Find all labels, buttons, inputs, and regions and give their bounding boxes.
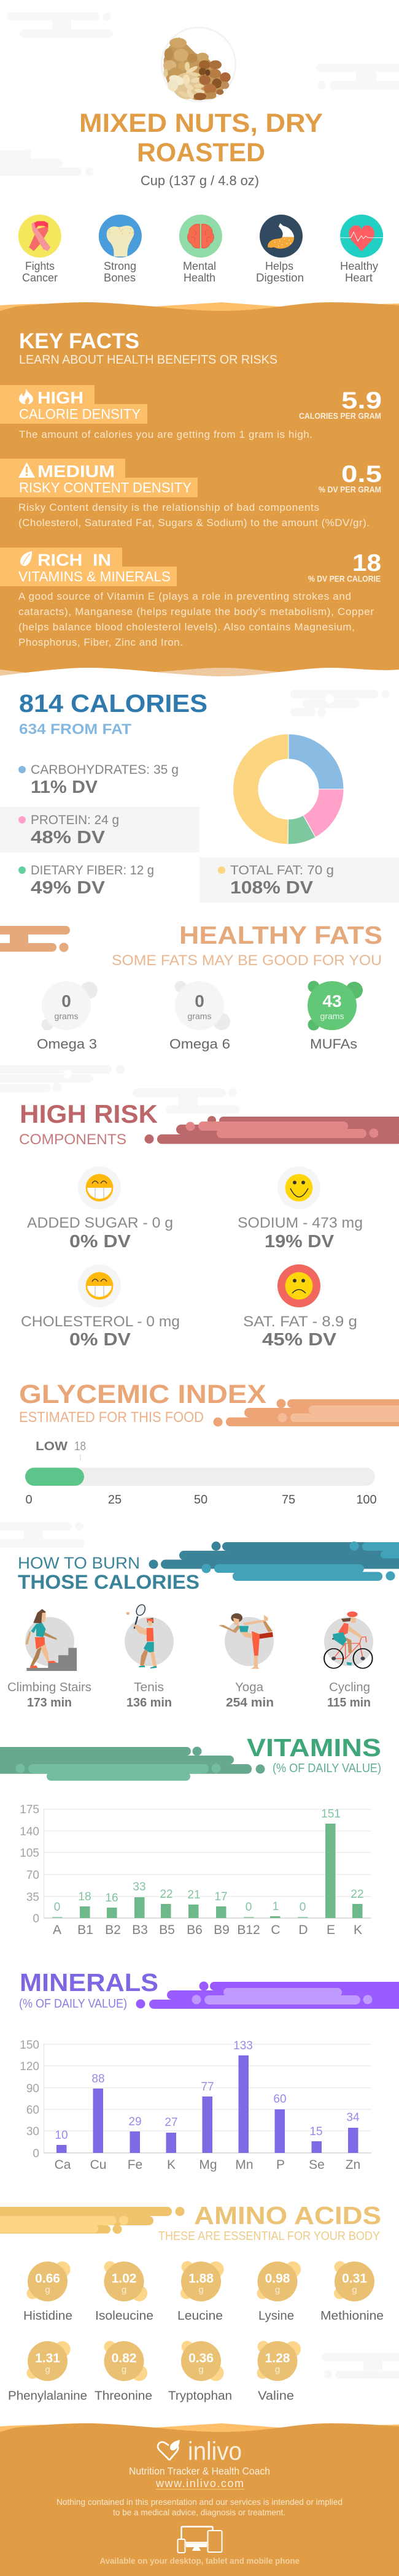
activity: climbing stairs: 173 min — [27, 1696, 72, 1710]
badge: valine: g — [275, 2364, 280, 2375]
activity: yoga: Yoga — [235, 1681, 264, 1694]
item: saturated fat — [243, 1264, 357, 1350]
bar chart: minerals: 77 — [201, 2081, 214, 2093]
heading: minerals: MINERALS — [20, 1968, 158, 1997]
activity: tennis: Tenis — [134, 1681, 164, 1694]
footer — [0, 2423, 399, 2576]
subheading: SOME FATS MAY BE GOOD FOR YOU — [112, 952, 382, 969]
activity: tennis: 136 min — [126, 1696, 172, 1710]
item: sodium: SODIUM - 473 mg — [238, 1215, 363, 1231]
item: cholesterol: 0% DV — [69, 1330, 131, 1350]
subheading: THESE ARE ESSENTIAL FOR YOUR BODY — [158, 2230, 380, 2243]
bar chart: vitamins: 151 — [321, 1808, 341, 1821]
panel: healthy fats — [0, 921, 382, 1052]
badge: tryptophan: g — [198, 2364, 204, 2375]
fact: high calorie density: The amount of calories you are getting from 1 gram is high. — [19, 429, 312, 440]
decorative stripes — [136, 1982, 399, 2009]
item: cholesterol — [21, 1264, 180, 1350]
badge: mufas: MUFAs — [310, 1036, 357, 1052]
bar chart: vitamins: 35 — [26, 1891, 39, 1904]
bar chart: vitamins: 17 — [214, 1890, 228, 1903]
badge: tryptophan — [168, 2341, 232, 2402]
bar chart: minerals: Mn — [235, 2158, 254, 2172]
fact: rich in vitamins and minerals: RICH IN — [37, 551, 111, 569]
fact: rich in vitamins and minerals — [0, 548, 381, 648]
macro: dietary fiber: 49% DV — [31, 878, 106, 898]
bar chart: vitamins: B6 — [187, 1923, 203, 1937]
bar chart: vitamins — [20, 1803, 371, 1937]
badge: threonine: g — [122, 2364, 126, 2375]
badge: tryptophan: 0.36 — [188, 2351, 214, 2366]
icon: healthy heart: Healthy — [340, 260, 378, 272]
macro: total fat: 108% DV — [230, 878, 314, 898]
fact: rich in vitamins and minerals: cataracts), Manganese (helps regulate the body's metabolism), Copper — [18, 606, 374, 617]
website link: www.inlivo.com — [155, 2477, 244, 2490]
serving size: Cup (137 g / 4.8 oz) — [141, 173, 259, 188]
gauge label — [36, 1440, 86, 1461]
icon: mental health — [179, 215, 222, 284]
bar chart: vitamins: C — [271, 1923, 281, 1937]
bar chart: minerals: K — [167, 2158, 176, 2172]
badge: mufas: grams — [320, 1011, 344, 1021]
activity: tennis — [125, 1603, 174, 1710]
bar chart: vitamins: 18 — [78, 1890, 91, 1903]
subheading: (% OF DAILY VALUE) — [273, 1762, 381, 1775]
heading: vitamins: VITAMINS — [247, 1733, 381, 1762]
bar chart: minerals: Ca — [55, 2158, 71, 2172]
bar chart: vitamins: 140 — [20, 1825, 39, 1838]
panel: calories — [0, 689, 399, 903]
item: added sugar: ADDED SUGAR - 0 g — [27, 1215, 173, 1231]
decorative stripes — [0, 2207, 184, 2234]
badge: omega 3: grams — [55, 1011, 78, 1021]
icon: helps digestion: Helps — [265, 260, 293, 272]
icon: strong bones: Bones — [104, 272, 136, 284]
icon: warning triangle — [18, 462, 35, 478]
item: added sugar: 0% DV — [69, 1232, 131, 1252]
icon: healthy heart: Heart — [345, 272, 373, 284]
bar chart: minerals: 34 — [346, 2111, 360, 2124]
activity: cycling — [324, 1611, 373, 1710]
badge: methionine — [320, 2261, 384, 2323]
heading — [18, 1554, 200, 1593]
gauge scale — [25, 1493, 377, 1507]
macro: dietary fiber: DIETARY FIBER: 12 g — [31, 863, 154, 877]
subheading: (% OF DAILY VALUE) — [19, 1997, 127, 2011]
badge: lysine: 0.98 — [265, 2272, 290, 2286]
macro: dietary fiber — [18, 863, 154, 898]
bar chart: vitamins: 22 — [160, 1888, 173, 1901]
panel: high risk components — [19, 1099, 399, 1350]
badge: leucine: g — [198, 2285, 204, 2295]
macro: carbohydrates: CARBOHYDRATES: 35 g — [31, 763, 179, 777]
icon: mental health: Mental — [183, 260, 216, 272]
heading: calories: 814 CALORIES — [19, 689, 207, 717]
bar chart: vitamins: B5 — [159, 1923, 175, 1937]
bar chart: vitamins: D — [298, 1923, 308, 1937]
badge: isoleucine: g — [122, 2285, 126, 2295]
badge: isoleucine — [95, 2261, 153, 2323]
fact: medium risky content density: (Cholesterol, Saturated Fat, Sugars & Sodium) to the amount (%DV/gr). — [18, 517, 370, 529]
fact: rich in vitamins and minerals: (helps balance blood cholesterol levels). Also contains Magnesium, — [18, 621, 355, 633]
bar chart: vitamins: 22 — [351, 1888, 364, 1901]
icon: helps digestion — [256, 215, 304, 284]
badge: leucine — [177, 2261, 224, 2323]
macro: total fat: TOTAL FAT: 70 g — [230, 863, 334, 877]
badge: lysine: g — [275, 2285, 280, 2295]
subheading: components: COMPONENTS — [19, 1131, 126, 1148]
bar chart: minerals: 15 — [309, 2125, 323, 2138]
heading: key facts: KEY FACTS — [19, 329, 139, 353]
badge: valine — [257, 2341, 301, 2402]
gauge scale: 0 — [25, 1493, 33, 1507]
bar chart: minerals — [20, 2039, 371, 2172]
bar chart: minerals: 150 — [20, 2039, 39, 2052]
bar chart: vitamins: B1 — [77, 1923, 93, 1937]
bar chart: vitamins: B12 — [237, 1923, 260, 1937]
macro: carbohydrates — [18, 763, 179, 797]
badge: omega 3: 0 — [61, 992, 71, 1011]
activity: climbing stairs — [7, 1609, 91, 1710]
panel: how to burn those calories — [7, 1542, 399, 1710]
badge: leucine: 1.88 — [188, 2272, 214, 2286]
badge: omega 6 — [169, 981, 230, 1052]
bar chart: minerals: Mg — [199, 2158, 217, 2172]
gauge scale: 75 — [282, 1493, 295, 1507]
icon: helps digestion: Digestion — [256, 272, 304, 284]
item: saturated fat: 45% DV — [262, 1330, 337, 1350]
bar chart: minerals: Zn — [346, 2158, 360, 2172]
badge: valine: 1.28 — [265, 2351, 290, 2366]
bar chart: vitamins: K — [354, 1923, 362, 1937]
gauge bar — [25, 1468, 375, 1486]
bar chart: minerals: 120 — [20, 2060, 39, 2073]
badge: mufas: 43 — [322, 992, 342, 1011]
item: sodium — [238, 1166, 363, 1252]
bar chart: minerals: 60 — [26, 2104, 39, 2117]
activity: yoga — [219, 1613, 274, 1710]
gauge label: LOW — [36, 1440, 68, 1453]
icon: strong bones — [99, 215, 142, 284]
decorative stripes — [145, 1116, 399, 1144]
macro: protein: 48% DV — [31, 828, 106, 847]
badge: omega 6: 0 — [195, 992, 204, 1011]
bar chart: vitamins: 16 — [105, 1892, 118, 1905]
activity: cycling: 115 min — [327, 1696, 371, 1710]
bar chart: minerals: 27 — [165, 2116, 178, 2129]
decorative stripes — [0, 1746, 265, 1781]
icon: fights cancer: Fights — [25, 260, 55, 272]
badge: omega 3 — [37, 981, 98, 1052]
badge: threonine: 0.82 — [112, 2351, 136, 2366]
macro: total fat — [218, 863, 334, 898]
activity: yoga: 254 min — [226, 1696, 274, 1710]
icon: leaf — [20, 551, 32, 566]
disclaimer: Nothing contained in this presentation and our services is intended or implied — [56, 2497, 343, 2507]
disclaimer: to be a medical advice, diagnosis or treatment. — [113, 2507, 285, 2517]
bar chart: vitamins: 0 — [300, 1901, 306, 1914]
bar chart: minerals: 60 — [273, 2093, 287, 2106]
fact: medium risky content density: RISKY CONTENT DENSITY — [19, 480, 192, 495]
macro: protein — [18, 813, 119, 847]
bar chart: minerals: 10 — [55, 2129, 68, 2142]
icon: fights cancer — [18, 215, 61, 284]
badge: methionine: g — [352, 2285, 357, 2295]
fact: rich in vitamins and minerals: A good source of Vitamin E (plays a role in preventing strokes and — [18, 590, 351, 602]
icon: devices — [178, 2526, 222, 2553]
bar chart: vitamins: 21 — [187, 1889, 201, 1901]
badge: histidine: Histidine — [23, 2309, 72, 2323]
title: ROASTED — [137, 138, 265, 167]
icon: strong bones: Strong — [104, 260, 136, 272]
bar chart: minerals: 0 — [33, 2147, 39, 2160]
bar chart: vitamins: B3 — [132, 1923, 148, 1937]
item: cholesterol: CHOLESTEROL - 0 mg — [21, 1313, 180, 1330]
bar chart: vitamins: 0 — [33, 1913, 39, 1925]
gauge scale: 100 — [356, 1493, 377, 1507]
bar chart: vitamins: B2 — [105, 1923, 121, 1937]
badge: phenylalanine: Phenylalanine — [8, 2389, 87, 2402]
panel: key facts — [0, 302, 399, 676]
fact: medium risky content density: MEDIUM — [37, 462, 115, 481]
gauge label: 18 — [74, 1440, 86, 1453]
heading: high risk: HIGH RISK — [20, 1099, 158, 1128]
donut chart — [233, 734, 344, 844]
badge: omega 6: Omega 6 — [169, 1036, 230, 1052]
item: saturated fat: SAT. FAT - 8.9 g — [243, 1313, 357, 1330]
badge: methionine: Methionine — [320, 2309, 384, 2323]
gauge scale: 50 — [194, 1493, 207, 1507]
tagline: Nutrition Tracker & Health Coach — [129, 2465, 270, 2477]
activity: cycling: Cycling — [329, 1681, 370, 1694]
bar chart: minerals: 88 — [91, 2073, 105, 2085]
fact: rich in vitamins and minerals: % DV PER CALORIE — [308, 574, 381, 584]
fact: high calorie density — [0, 385, 382, 440]
bar chart: vitamins: 1 — [273, 1900, 279, 1913]
bar chart: minerals: P — [276, 2158, 285, 2172]
availability note: Available on your desktop, tablet and mobile phone — [99, 2556, 300, 2566]
badge: leucine: Leucine — [177, 2309, 223, 2323]
fact: medium risky content density: Risky Content density is the relationship of bad components — [18, 502, 319, 513]
badge: mufas — [308, 981, 363, 1052]
fact: high calorie density: 5.9 — [341, 388, 382, 414]
heading: amino acids: AMINO ACIDS — [194, 2201, 381, 2230]
fact: rich in vitamins and minerals: VITAMINS & MINERALS — [18, 568, 171, 584]
health benefits icons — [18, 215, 383, 284]
panel: glycemic index — [19, 1380, 399, 1507]
bar chart: vitamins: B9 — [214, 1923, 230, 1937]
subheading: from fat: 634 FROM FAT — [19, 721, 131, 738]
badge: phenylalanine: g — [45, 2364, 50, 2375]
icon: fights cancer: Cancer — [22, 272, 58, 284]
bar chart: minerals: Cu — [90, 2158, 106, 2172]
bar chart: vitamins: A — [53, 1923, 61, 1937]
logo: inlivo — [158, 2437, 242, 2466]
badge: threonine — [95, 2341, 152, 2402]
fact: medium risky content density: % DV PER GRAM — [319, 484, 381, 494]
badge: tryptophan: Tryptophan — [168, 2389, 232, 2402]
heading: HOW TO BURN — [18, 1554, 140, 1572]
bar chart: minerals: Fe — [128, 2158, 142, 2172]
title — [79, 109, 323, 167]
activity: climbing stairs: Climbing Stairs — [7, 1681, 91, 1694]
fact: high calorie density: CALORIE DENSITY — [19, 406, 141, 422]
panel: minerals — [19, 1968, 399, 2172]
badge: methionine: 0.31 — [342, 2272, 367, 2286]
decorative stripes — [149, 1542, 399, 1581]
badge: phenylalanine: 1.31 — [35, 2351, 60, 2366]
subheading: ESTIMATED FOR THIS FOOD — [19, 1409, 204, 1426]
decorative stripes — [214, 1399, 399, 1426]
fact: high calorie density: CALORIES PER GRAM — [299, 411, 381, 421]
macro: carbohydrates: 11% DV — [31, 778, 98, 797]
panel: amino acids — [0, 2201, 384, 2402]
bar chart: minerals: 133 — [233, 2039, 253, 2052]
disclaimer — [56, 2497, 343, 2517]
bar chart: vitamins: E — [327, 1923, 335, 1937]
icon: healthy heart — [340, 215, 383, 284]
fact: medium risky content density: 0.5 — [341, 461, 382, 487]
badge: lysine: Lysine — [258, 2309, 294, 2323]
heading: THOSE CALORIES — [18, 1571, 200, 1593]
food photo: mixed nuts — [161, 28, 236, 101]
bar chart: vitamins: 175 — [20, 1803, 39, 1816]
fact: rich in vitamins and minerals: Phosphorus, Fiber, Zinc and Iron. — [18, 636, 183, 648]
bar chart: vitamins: 105 — [20, 1847, 39, 1860]
badge: threonine: Threonine — [95, 2389, 152, 2402]
bar chart: vitamins: 33 — [133, 1881, 146, 1894]
logo: inlivo: inlivo — [188, 2437, 242, 2466]
decorative stripes — [0, 926, 70, 952]
badge: histidine — [23, 2261, 72, 2323]
title: MIXED NUTS, DRY — [79, 109, 323, 138]
item: added sugar — [27, 1166, 173, 1252]
bar chart: vitamins: 0 — [246, 1901, 252, 1914]
badge: omega 6: grams — [188, 1011, 211, 1021]
icon: flame — [19, 388, 33, 404]
heading: healthy fats: HEALTHY FATS — [179, 921, 382, 949]
bar chart: vitamins: 70 — [26, 1869, 39, 1882]
badge: histidine: g — [45, 2285, 50, 2295]
badge: omega 3: Omega 3 — [37, 1036, 97, 1052]
bar chart: minerals: 90 — [26, 2082, 39, 2095]
macro: protein: PROTEIN: 24 g — [31, 813, 119, 827]
gauge scale: 25 — [108, 1493, 122, 1507]
item: sodium: 19% DV — [265, 1232, 335, 1252]
fact: rich in vitamins and minerals: 18 — [352, 550, 381, 576]
subheading: LEARN ABOUT HEALTH BENEFITS OR RISKS — [19, 353, 277, 367]
bar chart: minerals: 29 — [128, 2115, 142, 2128]
bar chart: minerals: Se — [309, 2158, 325, 2172]
badge: isoleucine: Isoleucine — [95, 2309, 153, 2323]
badge: isoleucine: 1.02 — [112, 2272, 136, 2286]
bar chart: vitamins: 0 — [54, 1901, 60, 1914]
icon: mental health: Health — [184, 272, 215, 284]
badge: lysine — [257, 2261, 301, 2323]
panel: vitamins — [0, 1733, 381, 1937]
badge: histidine: 0.66 — [35, 2272, 60, 2286]
bar chart: minerals: 30 — [26, 2125, 39, 2138]
badge: valine: Valine — [258, 2389, 294, 2402]
fact: high calorie density: HIGH — [37, 388, 83, 407]
heading: glycemic index: GLYCEMIC INDEX — [19, 1380, 266, 1409]
fact: medium risky content density — [0, 459, 382, 529]
badge: phenylalanine — [8, 2341, 87, 2402]
